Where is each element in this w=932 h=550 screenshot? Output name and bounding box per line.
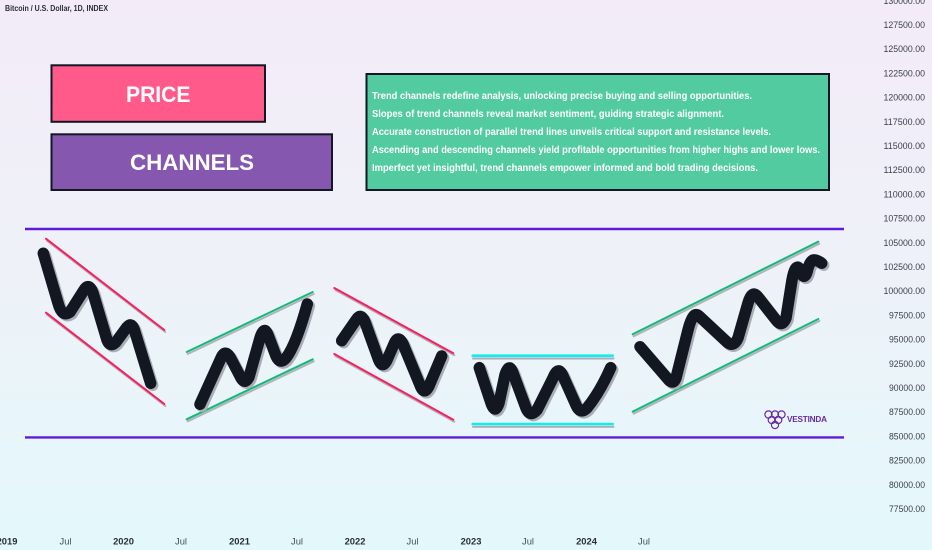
- price axis: 77500.00: [889, 504, 925, 515]
- time axis: 2024: [576, 536, 598, 546]
- price axis: 97500.00: [889, 310, 925, 321]
- price axis: 127500.00: [884, 20, 925, 31]
- range line: bottom: [25, 436, 844, 439]
- price axis: 105000.00: [884, 238, 925, 249]
- price axis: 92500.00: [889, 359, 925, 370]
- text panel: key points: [366, 74, 829, 190]
- time axis: [0, 536, 650, 546]
- text panel: key points: Trend channels redefine analysis, unlocking precise buying and selling opportunities.: [372, 91, 752, 102]
- time axis: Jul: [522, 536, 534, 546]
- time axis: Jul: [638, 536, 650, 546]
- time axis: 2022: [345, 536, 365, 546]
- price axis: 125000.00: [884, 44, 925, 55]
- price axis: 95000.00: [889, 335, 925, 346]
- text panel: key points: Accurate construction of parallel trend lines unveils critical support and resistance levels.: [372, 127, 771, 138]
- time axis: Jul: [175, 536, 187, 546]
- price axis: 112500.00: [884, 165, 925, 176]
- time axis: Jul: [291, 536, 303, 546]
- price axis: 117500.00: [884, 117, 925, 128]
- price axis: 87500.00: [889, 407, 925, 418]
- channel 2: ascending: [187, 292, 314, 421]
- channel 4: sideways: [473, 356, 614, 427]
- price axis: 90000.00: [889, 383, 925, 394]
- price axis: 82500.00: [889, 456, 925, 467]
- logo: vestinda: [765, 411, 827, 429]
- heading: channels: [52, 134, 332, 190]
- chart title: Bitcoin / U.S. Dollar, 1D, INDEX: [5, 4, 108, 13]
- channel 3: descending: [334, 288, 454, 422]
- price axis: 122500.00: [884, 68, 925, 79]
- heading: channels: CHANNELS: [130, 150, 254, 175]
- price axis: 115000.00: [884, 141, 925, 152]
- logo: vestinda: VESTINDA: [787, 415, 827, 424]
- time axis: 2021: [229, 536, 250, 546]
- price axis: 85000.00: [889, 431, 925, 442]
- price axis: 80000.00: [889, 480, 925, 491]
- text panel: key points: Slopes of trend channels reveal market sentiment, guiding strategic alignment.: [372, 109, 724, 120]
- time axis: 2023: [461, 536, 481, 546]
- channel 5: ascending: [633, 242, 824, 414]
- price axis: 110000.00: [884, 189, 925, 200]
- heading: price: [52, 65, 265, 122]
- range line: top: [25, 228, 844, 230]
- channel 1: descending: [43, 239, 165, 406]
- text panel: key points: Imperfect yet insightful, trend channels empower informed and bold trading decisions.: [372, 163, 758, 174]
- heading: price: PRICE: [126, 82, 190, 107]
- price axis: 100000.00: [884, 286, 925, 297]
- price axis: 107500.00: [884, 214, 925, 225]
- time axis: Jul: [60, 536, 71, 546]
- price axis: 102500.00: [884, 262, 925, 273]
- price axis: 120000.00: [884, 93, 925, 104]
- time axis: 2020: [113, 536, 134, 546]
- time axis: Jul: [407, 536, 418, 546]
- text panel: key points: Ascending and descending channels yield profitable opportunities from higher highs and lower lows.: [372, 145, 820, 156]
- price axis: [884, 0, 925, 515]
